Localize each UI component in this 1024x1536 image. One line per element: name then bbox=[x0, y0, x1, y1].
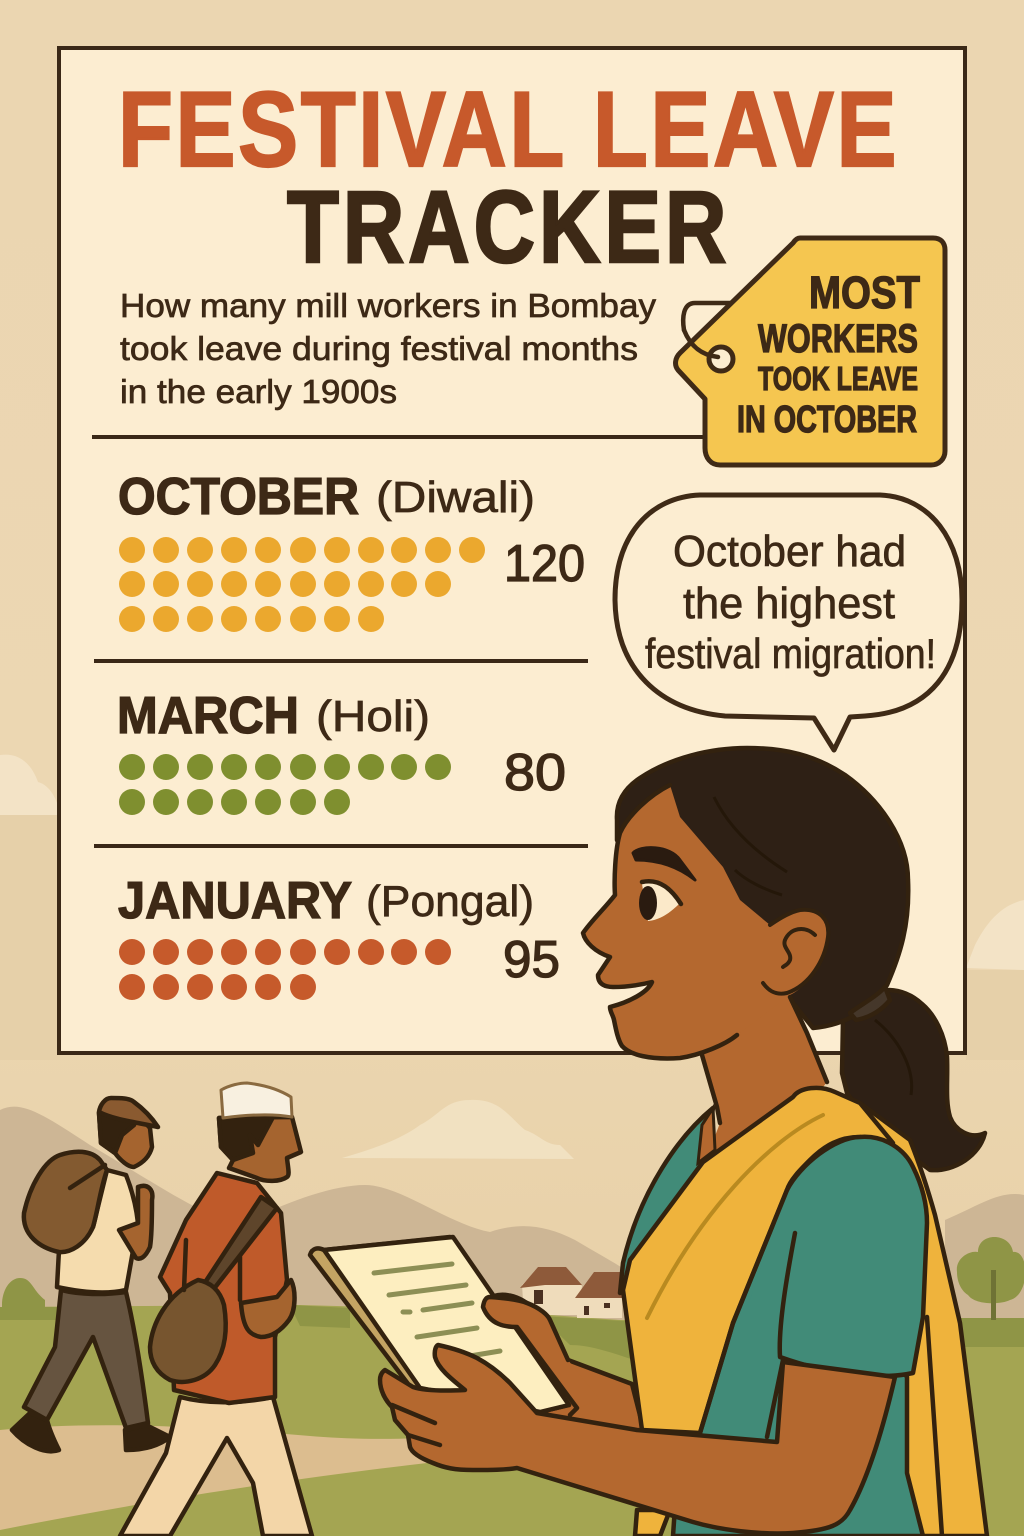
section: October bbox=[118, 468, 585, 632]
dirt path bbox=[0, 1425, 470, 1530]
speech bubble bbox=[615, 495, 962, 750]
ear outline bbox=[763, 910, 828, 994]
eye bbox=[639, 881, 681, 921]
subtitle: in the early 1900s bbox=[120, 373, 397, 410]
heading: January: (Pongal) bbox=[366, 877, 534, 926]
panel: tracker card bbox=[59, 48, 965, 1053]
blouse sleeve fill bbox=[750, 1137, 927, 1376]
back arm bbox=[486, 1295, 645, 1435]
sari lower piece bbox=[635, 1510, 670, 1536]
value: 80: 80 bbox=[504, 744, 566, 802]
title: TRACKER bbox=[287, 170, 726, 284]
callout tag: most workers: MOST bbox=[809, 267, 920, 318]
speech bubble: the highest bbox=[683, 579, 895, 628]
ponytail bbox=[842, 990, 985, 1170]
bush bbox=[2, 1278, 45, 1307]
neck overlap bbox=[698, 1108, 715, 1163]
callout tag: most workers: IN OCTOBER bbox=[737, 399, 917, 441]
neck bbox=[702, 995, 827, 1170]
subtitle: took leave during festival months bbox=[120, 330, 638, 367]
neck lines bbox=[702, 997, 827, 1123]
cloud: centre bbox=[342, 1100, 574, 1159]
figure: woman with ledger bbox=[310, 748, 987, 1536]
callout tag: most workers bbox=[676, 238, 945, 465]
heading: March bbox=[117, 687, 430, 745]
figure: walker with sack bbox=[12, 1098, 170, 1451]
ledger lines bbox=[374, 1264, 500, 1356]
heading: October: OCTOBER bbox=[118, 468, 359, 526]
blouse left sliver bbox=[620, 1108, 713, 1293]
sari inner pleat bbox=[927, 1317, 942, 1536]
section: March bbox=[117, 687, 566, 815]
sari front bbox=[623, 1088, 893, 1433]
far hill band bbox=[0, 815, 1024, 1060]
heading: March: (Holi) bbox=[316, 692, 430, 741]
value: 95: 95 bbox=[503, 931, 560, 989]
houses bbox=[520, 1267, 622, 1318]
speech bubble: October had bbox=[673, 527, 906, 576]
cloud: upper left bbox=[0, 755, 60, 815]
tree bbox=[957, 1237, 1024, 1320]
torso line bbox=[700, 1190, 787, 1437]
sari fold bbox=[647, 1115, 823, 1318]
heading: October bbox=[118, 468, 535, 526]
darker ground strip bbox=[0, 1305, 1024, 1362]
sari right drape bbox=[860, 1103, 987, 1536]
ledger book bbox=[310, 1237, 569, 1412]
hills bbox=[0, 1107, 640, 1320]
back hair bbox=[617, 748, 908, 1028]
front arm and hand bbox=[380, 1345, 895, 1533]
title: FESTIVAL LEAVE bbox=[118, 70, 896, 189]
face outline bbox=[583, 785, 737, 1058]
heading: January bbox=[118, 872, 534, 930]
hair band bbox=[850, 987, 890, 1020]
face fill bbox=[583, 785, 828, 1058]
subtitle bbox=[120, 287, 657, 410]
section: January bbox=[118, 872, 560, 1000]
eyebrow bbox=[633, 848, 695, 880]
speech bubble: festival migration! bbox=[645, 630, 936, 677]
heading: October: (Diwali) bbox=[376, 473, 535, 522]
value: 120: 120 bbox=[504, 535, 585, 593]
cloud: right bbox=[966, 900, 1024, 970]
dots: March bbox=[119, 754, 451, 815]
ground bbox=[0, 1305, 1024, 1536]
title bbox=[118, 70, 896, 284]
hair strands bbox=[714, 797, 912, 1095]
finger lines bbox=[392, 1405, 440, 1445]
callout tag: most workers: WORKERS bbox=[758, 317, 918, 361]
callout tag: most workers: TOOK LEAVE bbox=[758, 360, 918, 397]
dots: January bbox=[119, 939, 451, 1000]
blouse lower bbox=[673, 1190, 923, 1536]
sleeve outline bbox=[780, 1137, 927, 1376]
right hill bbox=[945, 1194, 1024, 1320]
dots: October bbox=[119, 537, 485, 632]
back hand thumb bbox=[483, 1297, 600, 1415]
heading: March: MARCH bbox=[117, 687, 299, 745]
tag string back bbox=[683, 303, 730, 330]
subtitle: How many mill workers in Bombay bbox=[120, 287, 657, 324]
figure: walker with cap bbox=[120, 1083, 312, 1536]
heading: January: JANUARY bbox=[118, 872, 352, 930]
